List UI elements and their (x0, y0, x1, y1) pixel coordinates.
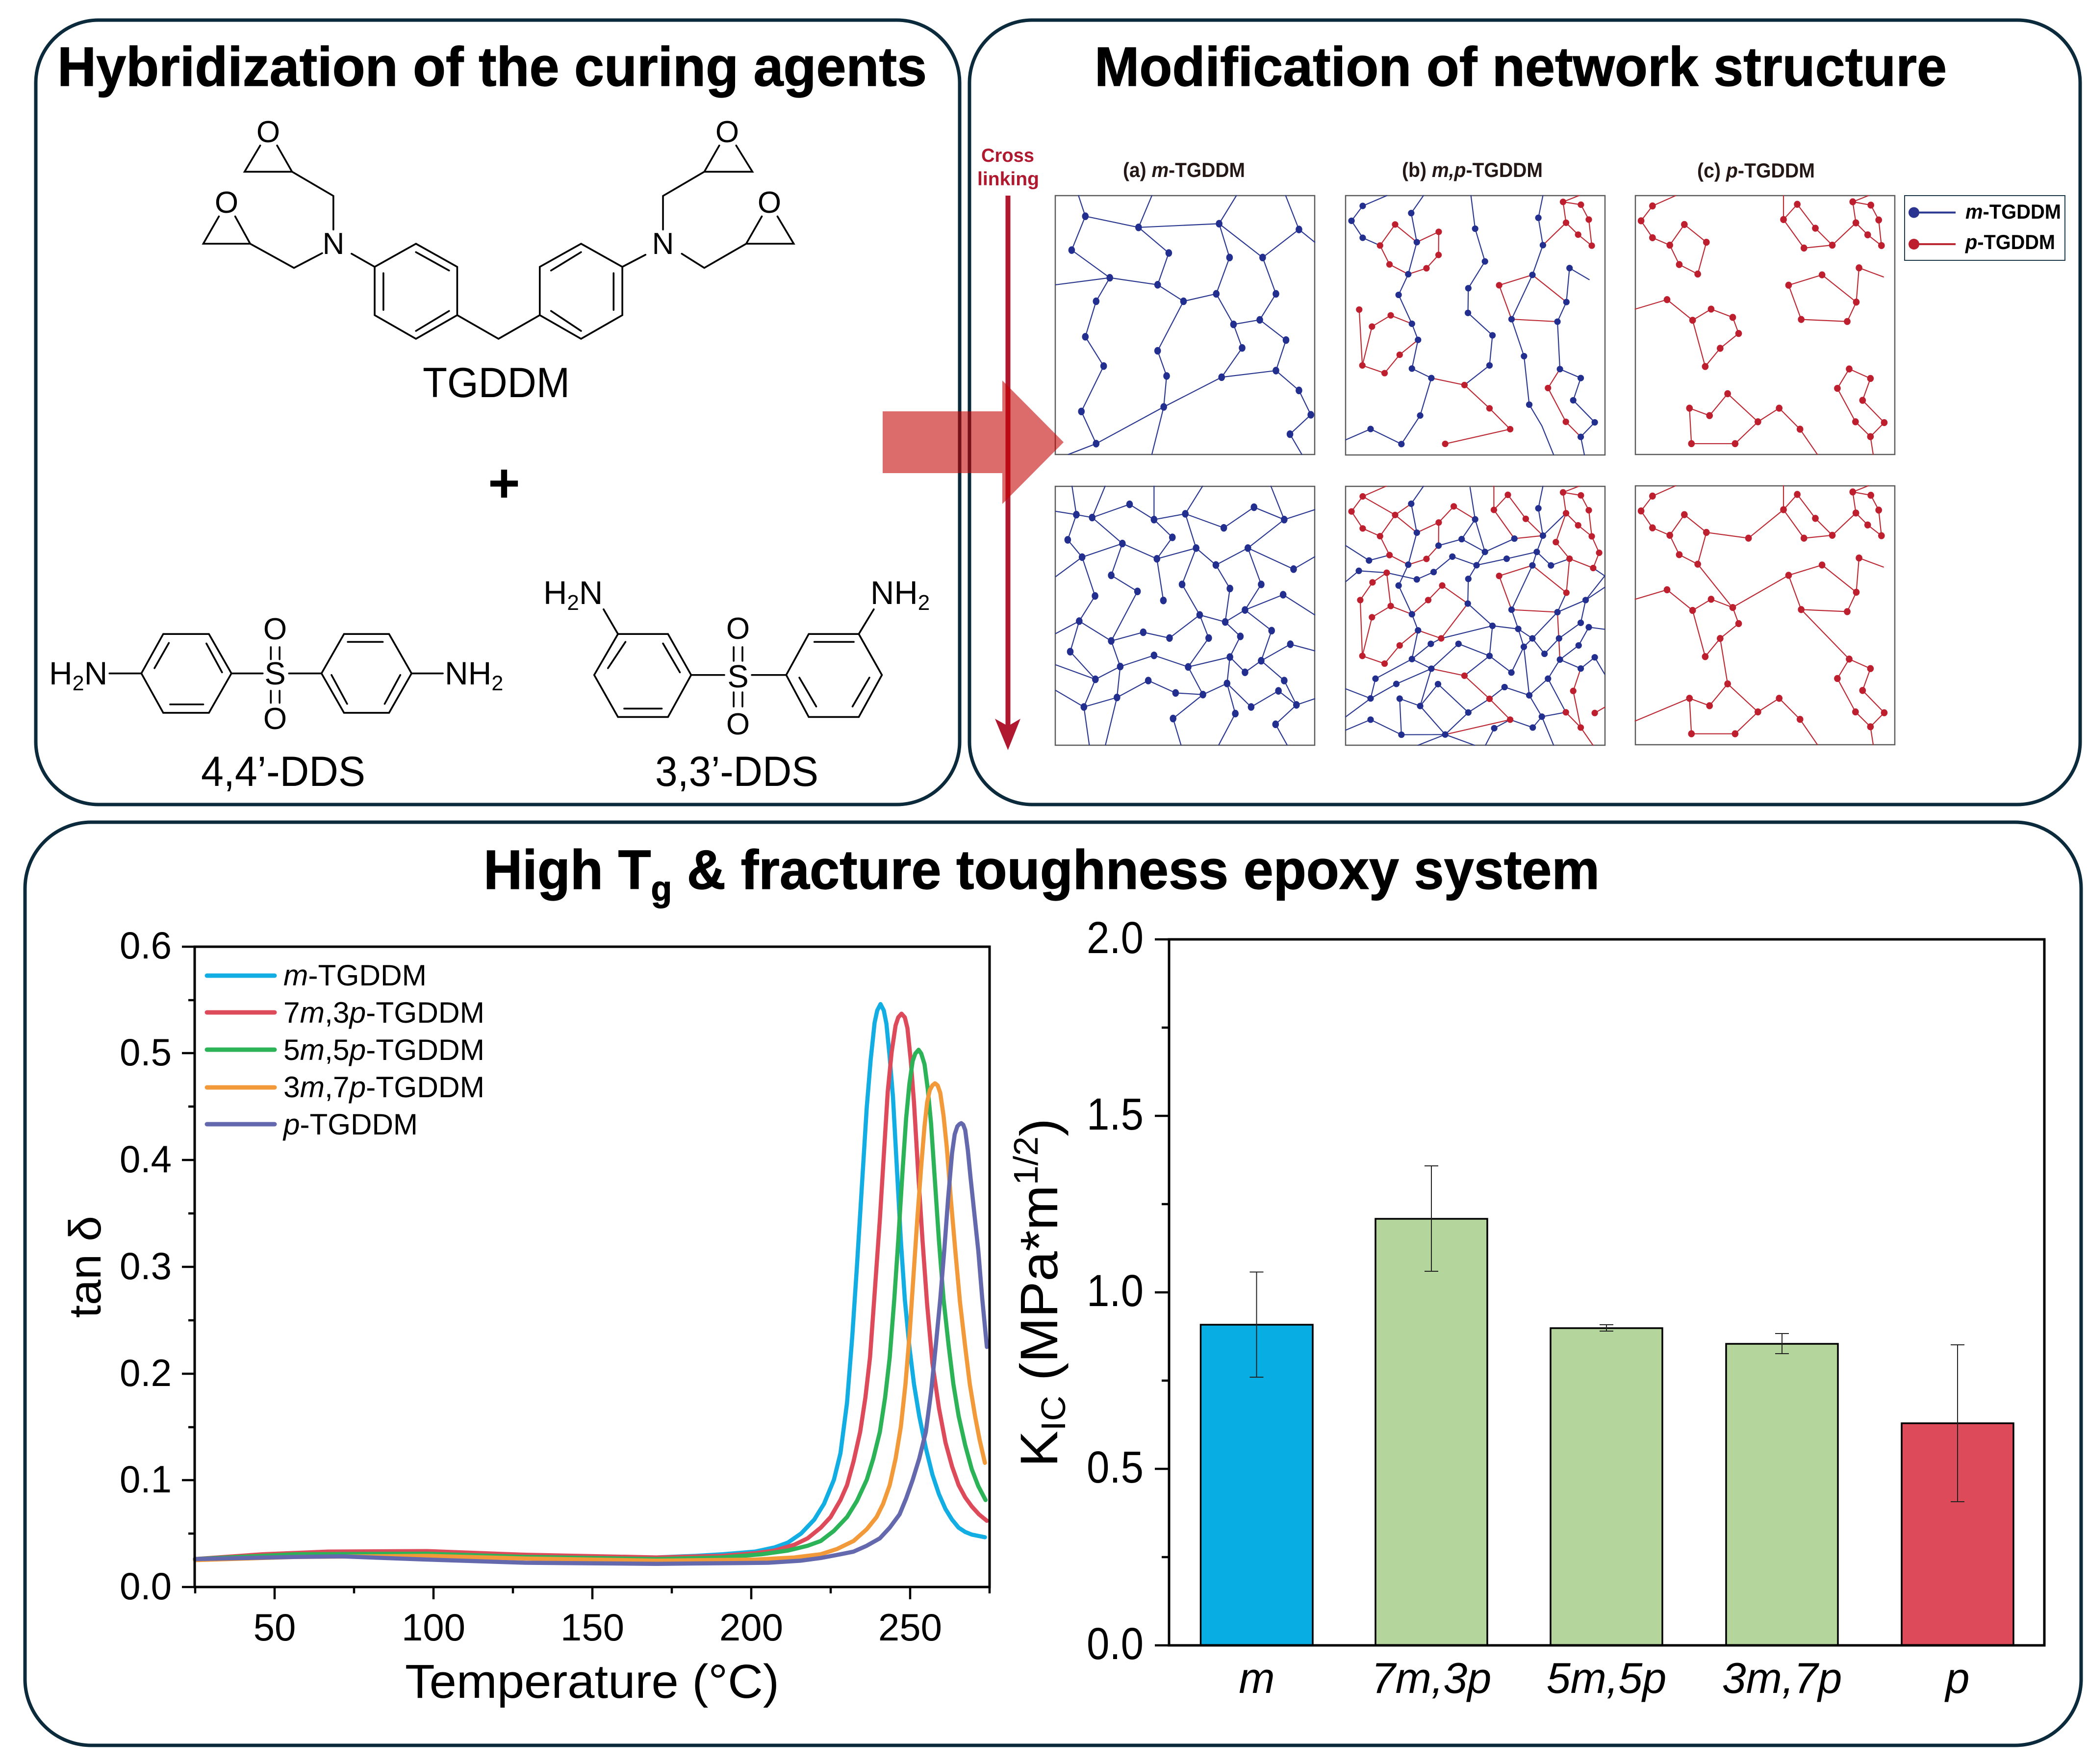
y axis title: ) (1009, 1118, 1069, 1136)
legend: network species: p-TGDDM (1965, 230, 2055, 253)
column title (c): (c) p-TGDDM (1697, 159, 1815, 182)
legend: tan delta curves (207, 959, 484, 1141)
molecule: 3,3'-DDS: 2 (918, 591, 930, 615)
y axis title: 1/2 (1007, 1136, 1045, 1185)
y tick labels: 0.6 (120, 924, 172, 967)
x category labels: p (1944, 1654, 1969, 1702)
molecule: 3,3'-DDS: O (726, 707, 750, 741)
molecule: TGDDM: N (652, 227, 674, 261)
molecule: TGDDM: O (215, 186, 238, 220)
y tick labels: 0.2 (120, 1351, 172, 1394)
panel: modification of network structure (969, 20, 2080, 805)
molecule: 4,4'-DDS: NH (445, 655, 491, 691)
y tick labels: 0.5 (120, 1031, 172, 1074)
x category labels: 7m,3p (1372, 1654, 1491, 1702)
heading: high Tg: g (651, 869, 672, 908)
network: p-TGDDM after crosslinking (1635, 486, 1895, 745)
legend: tan delta curves: 5m,5p-TGDDM (283, 1033, 484, 1066)
y axis title: (MPa*m (1009, 1185, 1069, 1396)
y tick labels: 0.4 (120, 1137, 172, 1181)
bars (1200, 1219, 2013, 1645)
cross linking label (977, 145, 1039, 190)
arrow: cross linking direction (995, 196, 1020, 750)
panel: hybridization of the curing agents (36, 20, 960, 805)
molecule: 3,3'-DDS: S (727, 658, 749, 694)
cross linking label: linking (977, 169, 1039, 190)
x tick labels: 50 (254, 1606, 296, 1649)
molecule: 3,3'-DDS: N (579, 575, 603, 611)
x axis title: Temperature (°C) (405, 1655, 779, 1708)
y axis title: tan δ (60, 1216, 110, 1318)
y tick labels: 0.1 (120, 1458, 172, 1501)
molecule: 3,3'-DDS: 2 (567, 591, 579, 615)
chart: KIC bar chart (1007, 913, 2044, 1702)
network: p-TGDDM before crosslinking (1635, 196, 1895, 454)
molecule: 4,4'-DDS: O (263, 612, 287, 646)
x category labels (1239, 1654, 1969, 1702)
molecule: TGDDM: N (323, 227, 344, 261)
label: 4,4'-DDS: 4,4’-DDS (201, 748, 365, 795)
chart: tan delta vs temperature (60, 924, 990, 1708)
molecule: 3,3'-DDS: NH (870, 575, 918, 611)
network: m-TGDDM after crosslinking (1055, 486, 1315, 745)
heading: hybridization: Hybridization of the curing agents (57, 36, 927, 98)
legend: tan delta curves: p-TGDDM (282, 1108, 418, 1141)
y tick labels: 1.0 (1087, 1266, 1144, 1316)
molecule: 3,3'-DDS: O (726, 612, 750, 646)
y tick labels: 2.0 (1087, 913, 1144, 963)
y axis title: K (1009, 1432, 1069, 1467)
label: 3,3'-DDS: 3,3’-DDS (655, 748, 818, 795)
x tick labels: 150 (560, 1606, 624, 1649)
molecule: 3,3'-DDS: H (543, 575, 567, 611)
y tick labels: 1.5 (1087, 1089, 1144, 1139)
plus sign: + (488, 453, 520, 514)
x tick labels (254, 1606, 942, 1649)
y axis title: IC (1034, 1396, 1072, 1431)
heading: high Tg: High T (484, 839, 656, 901)
x tick labels: 100 (402, 1606, 465, 1649)
heading: high Tg: & fracture toughness epoxy system (672, 839, 1600, 901)
x category labels: m (1239, 1654, 1275, 1702)
molecule: TGDDM: O (715, 115, 739, 149)
cross linking label: Cross (981, 145, 1034, 166)
molecule: 4,4'-DDS: H (49, 655, 73, 691)
label: TGDDM: TGDDM (423, 359, 570, 406)
y tick labels: 0.5 (1087, 1442, 1144, 1492)
network: m,p-TGDDM after crosslinking (1346, 486, 1605, 745)
y tick labels: 0.0 (1087, 1619, 1144, 1669)
molecule: TGDDM: O (256, 115, 280, 149)
molecule: 3,3'-DDS (543, 575, 930, 741)
x category labels: 5m,5p (1547, 1654, 1666, 1702)
molecule: 4,4'-DDS: 2 (73, 672, 84, 695)
heading: modification: Modification of network structure (1095, 36, 1947, 98)
x tick labels: 250 (878, 1606, 942, 1649)
molecule: TGDDM: O (758, 186, 781, 220)
arrow: from curing agents to network structure (883, 380, 1064, 504)
curves: tan delta (195, 1004, 987, 1564)
molecule: 4,4'-DDS: S (264, 655, 286, 691)
molecule: 4,4'-DDS (49, 612, 503, 736)
legend: tan delta curves: 7m,3p-TGDDM (283, 996, 484, 1029)
error bars (1249, 1166, 1964, 1502)
y tick labels (120, 924, 172, 1608)
molecule: TGDDM (204, 115, 794, 339)
x category labels: 3m,7p (1722, 1654, 1842, 1702)
molecule: 4,4'-DDS: N (84, 655, 107, 691)
legend: tan delta curves: 3m,7p-TGDDM (283, 1071, 484, 1104)
molecule: 4,4'-DDS: O (263, 702, 287, 736)
network: m,p-TGDDM before crosslinking (1346, 196, 1605, 455)
legend: tan delta curves: m-TGDDM (283, 959, 427, 992)
y tick labels (1087, 913, 1144, 1669)
panel: high Tg and fracture toughness epoxy system (25, 822, 2081, 1745)
column title (b): (b) m,p-TGDDM (1402, 158, 1543, 181)
column title (a): (a) m-TGDDM (1123, 158, 1245, 181)
molecule: 4,4'-DDS: 2 (491, 672, 503, 695)
legend: network species (1905, 196, 2065, 260)
y tick labels: 0.0 (120, 1564, 172, 1608)
x tick labels: 200 (719, 1606, 783, 1649)
network: m-TGDDM before crosslinking (1055, 196, 1315, 454)
y tick labels: 0.3 (120, 1244, 172, 1287)
legend: network species: m-TGDDM (1965, 200, 2061, 223)
